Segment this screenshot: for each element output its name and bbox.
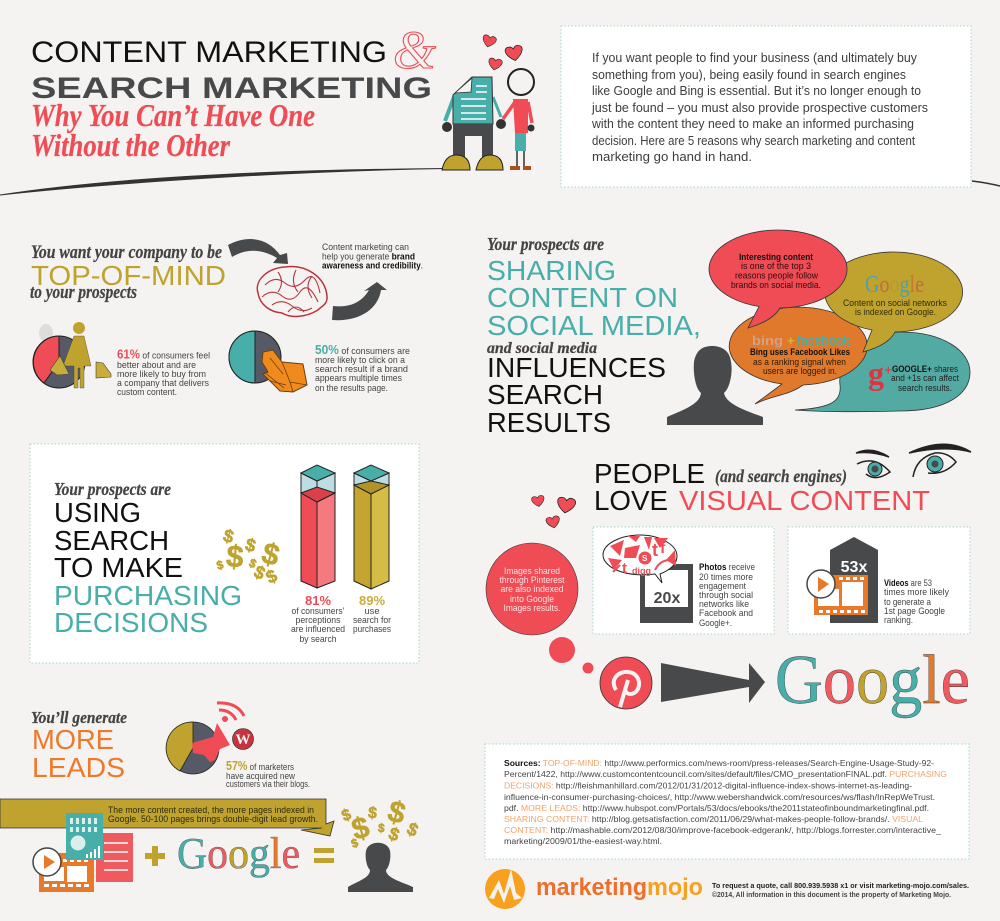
bar label: 81% xyxy=(291,593,345,644)
icon: photo frame xyxy=(640,564,693,623)
title: Without the Other xyxy=(31,127,230,163)
text: videos: to generate a xyxy=(884,597,932,607)
speech bubble: Bing and Facebook: users are logged in. xyxy=(763,366,837,376)
title: & xyxy=(393,20,436,80)
panel: sources xyxy=(485,744,969,859)
bar label: 89%: purchases xyxy=(353,624,391,634)
pie chart and megaphone: 57% xyxy=(166,703,254,774)
text: photos xyxy=(699,562,755,628)
logo: Marketing Mojo xyxy=(485,869,703,909)
panel: photos xyxy=(593,527,774,634)
panel: intro text: with the content they need to make an informed purchasing xyxy=(591,117,914,131)
thought bubble: Pinterest: through Pinterest xyxy=(500,575,565,585)
heading: more leads xyxy=(31,708,127,783)
icon: dollar signs: $ xyxy=(243,534,258,556)
icon: 53x tag and film strip xyxy=(807,537,878,623)
stat: 61%: more likely to buy from xyxy=(117,369,206,379)
icon: 53x tag and film strip: 53x xyxy=(841,559,867,576)
pie chart and megaphone: 57%: W xyxy=(236,732,250,748)
callout banner: The more content created, the more pages indexed in xyxy=(108,805,314,815)
heading: using search to make purchasing decisions: TO MAKE xyxy=(54,552,183,583)
speech bubble: interesting content: reasons people follow xyxy=(735,270,818,280)
panel: sources: CONTENT: http://mashable.com/2012/08/30/improve-facebook-edgerank/, http://blogs.forrester.com/interactive_ xyxy=(504,825,941,835)
icon: person with dollar signs: $ xyxy=(349,835,360,851)
icon: person with dollar signs: $ xyxy=(367,805,378,822)
pie chart and cursor: 50% xyxy=(229,331,307,392)
heading: top-of-mind: You want your company to be xyxy=(31,242,222,263)
heading: sharing content: Your prospects are xyxy=(487,234,604,254)
icon: person with dollar signs: $ xyxy=(386,823,402,845)
speech bubble: Google+: and +1s can affect xyxy=(891,373,959,383)
stat: 50%: search result if a brand xyxy=(315,364,408,374)
icon: person silhouette xyxy=(667,346,763,425)
title xyxy=(31,20,436,163)
logo: Marketing Mojo: marketing xyxy=(536,874,647,901)
icon: social media speech bubble: S xyxy=(642,554,648,563)
stat: 61%: better about and are xyxy=(117,360,196,370)
icon: dollar signs: $ xyxy=(221,525,236,547)
heading: people love visual content: (and search engines) xyxy=(715,466,847,487)
text: brand awareness: Content marketing can xyxy=(322,242,409,252)
pie chart and shopper: 61% xyxy=(33,322,111,388)
speech bubble: Bing and Facebook: bing xyxy=(752,333,783,348)
panel: intro text: like Google and Bing is essential. But it’s no longer enough to xyxy=(592,84,921,98)
callout banner xyxy=(0,799,334,836)
stat: 57%: have acquired new xyxy=(226,771,295,781)
panel: intro text: something from you), being easily found in search engines xyxy=(592,68,906,82)
bar label: 89%: search for xyxy=(353,615,391,625)
speech bubble: Google+: + xyxy=(884,363,893,379)
arrow: into brain xyxy=(228,239,288,264)
speech bubble: Bing and Facebook: Bing uses Facebook Likes xyxy=(750,347,850,357)
bar label: 81%: perceptions xyxy=(296,615,341,625)
stat: 50% xyxy=(315,343,410,393)
icon: person with dollar signs: $ xyxy=(404,818,421,841)
speech bubble: Bing and Facebook: as a ranking signal when xyxy=(753,357,846,367)
heading: sharing content: SEARCH xyxy=(487,379,603,410)
heading: sharing content: INFLUENCES xyxy=(487,352,666,383)
text: brand awareness xyxy=(322,242,423,270)
icon: social media speech bubble: f xyxy=(660,540,666,557)
heading: more leads: MORE xyxy=(32,724,114,755)
icon: hearts above couple xyxy=(481,34,524,71)
thought bubble: Pinterest: Images shared xyxy=(504,566,560,576)
logo: Google small: Google xyxy=(177,829,300,878)
speech bubble: Google+: GOOGLE+ shares xyxy=(892,364,958,374)
bar label: 89% xyxy=(353,593,391,634)
stat: 57% xyxy=(226,759,310,789)
bar label: 81%: 81% xyxy=(305,593,331,608)
title: CONTENT MARKETING xyxy=(31,36,387,69)
speech bubble: Bing and Facebook: facebook xyxy=(797,332,850,348)
panel: purchasing decisions xyxy=(30,444,419,663)
heading: more leads: LEADS xyxy=(32,752,125,783)
heading: sharing content: SHARING xyxy=(487,255,616,286)
bar label: 89%: use xyxy=(364,606,380,616)
stat: 50%: on the results page. xyxy=(315,383,388,393)
bar chart: 81% xyxy=(301,465,335,588)
speech bubble: Google: Content on social networks xyxy=(843,298,947,308)
speech bubble: interesting content: Interesting content xyxy=(739,252,813,262)
stat: 61% xyxy=(117,348,210,397)
speech bubble: interesting content xyxy=(709,230,847,328)
speech bubble: interesting content: brands on social media. xyxy=(731,280,821,290)
icon: dollar signs: $ xyxy=(251,561,268,584)
icon: Pinterest logo xyxy=(600,657,652,709)
stat: 57%: 57% of marketers xyxy=(226,759,294,773)
heading: sharing content: SOCIAL MEDIA, xyxy=(487,310,701,341)
icon: hearts xyxy=(531,495,576,529)
panel: sources: influence-in-consumer-purchasing-choices/, http://www.webershandwick.com/resources/ws/flash/InRepWeTrust. xyxy=(504,792,935,802)
icon: dollar signs: $ xyxy=(215,557,225,573)
text: videos xyxy=(884,578,949,625)
heading: people love visual content: PEOPLE xyxy=(594,458,705,489)
stat: 61%: custom content. xyxy=(117,387,177,397)
heading: using search to make purchasing decisions: SEARCH xyxy=(54,525,169,556)
text: videos: Videos are 53 xyxy=(884,578,932,588)
icon: social media speech bubble xyxy=(603,535,677,583)
thought bubble: Pinterest: are also indexed xyxy=(500,584,564,594)
icon: person with dollar signs xyxy=(339,795,421,892)
footer text: To request a quote, call 800.939.5938 x1 or visit marketing-mojo.com/sales. xyxy=(712,881,969,890)
bar label: 81%: by search xyxy=(300,634,336,644)
text: photos: networks like xyxy=(699,599,749,609)
heading: sharing content: and social media xyxy=(487,340,597,357)
icon: person with dollar signs: $ xyxy=(348,811,373,847)
heading: sharing content: CONTENT ON xyxy=(487,282,678,313)
speech bubble: Google+: search results. xyxy=(898,383,952,393)
title: SEARCH MARKETING xyxy=(31,72,432,105)
icon: dollar signs: $ xyxy=(225,538,245,575)
icon: dollar signs: $ xyxy=(247,556,259,571)
title: Why You Can’t Have One xyxy=(31,97,315,133)
icon: eyes xyxy=(856,444,971,478)
icon: dollar signs: $ xyxy=(258,537,283,573)
logo: Marketing Mojo: mojo xyxy=(647,874,703,901)
text: photos: Google+. xyxy=(699,618,732,628)
heading: people love visual content xyxy=(594,458,930,516)
panel: sources: SHARING CONTENT: http://blog.getsatisfaction.com/2011/06/29/what-makes-people-follow-brands/. VISUAL xyxy=(504,814,923,824)
heading: top-of-mind: TOP-OF-MIND xyxy=(31,260,226,291)
panel: sources: Percent/1422, http://www.customcontentcouncil.com/sites/default/files/CMO_presentationFINAL.pdf. PURCHASING xyxy=(504,769,947,779)
panel: videos xyxy=(788,527,970,634)
icon: photo frame: 20x xyxy=(654,590,680,607)
text: brand awareness: awareness and credibility. xyxy=(322,260,423,270)
icon: person with dollar signs: $ xyxy=(384,795,409,831)
speech bubble: Bing and Facebook xyxy=(729,307,867,404)
heading: using search to make purchasing decisions: DECISIONS xyxy=(54,607,208,638)
stat: 61%: a company that delivers xyxy=(117,378,209,388)
panel: sources: Sources: TOP-OF-MIND: http://www.performics.com/news-room/press-releases/Search-Engine-Usage-Study-92- xyxy=(504,758,934,768)
icon: dollar signs: $ xyxy=(263,565,280,588)
panel: sources: pdf. MORE LEADS: http://www.hubspot.com/Portals/53/docs/ebooks/the2011stateofinboundmarketingfinal.pdf. xyxy=(504,803,929,813)
panel: sources: DECISIONS: http://fleishmanhillard.com/2012/01/31/2012-digital-influence-index-shows-internet-as-leading- xyxy=(504,780,912,790)
icon: social media speech bubble: t xyxy=(652,540,658,560)
equation: plus sign xyxy=(145,846,165,866)
speech bubble: Google+: g xyxy=(868,355,884,391)
heading: using search to make purchasing decisions: Your prospects are xyxy=(54,479,171,499)
text: photos: Photos receive xyxy=(699,562,755,572)
text: photos: engagement xyxy=(699,581,746,591)
arrow: out of brain xyxy=(332,282,387,320)
icon: brain xyxy=(257,267,327,316)
panel: intro text: just be found – you must also provide prospective customers xyxy=(591,101,928,115)
text: brand awareness: help you generate brand xyxy=(322,252,415,262)
heading: people love visual content: LOVE xyxy=(594,485,668,516)
thought bubble: Pinterest xyxy=(486,543,594,674)
stat: 50%: more likely to click on a xyxy=(315,355,406,365)
text: videos: ranking. xyxy=(884,615,913,625)
arrow: Pinterest to Google xyxy=(661,663,765,703)
callout banner: Google. 50-100 pages brings double-digit lead growth. xyxy=(108,814,318,824)
panel: intro text xyxy=(561,26,971,187)
speech bubble: Google: is indexed on Google. xyxy=(855,307,936,317)
text: photos: 20 times more xyxy=(699,572,753,582)
heading: people love visual content: VISUAL CONTENT xyxy=(679,485,930,516)
icon: social media speech bubble: t xyxy=(622,560,627,577)
speech bubble: Bing and Facebook: + xyxy=(787,333,795,348)
bar label: 81%: are influenced xyxy=(291,624,345,634)
equation: equals sign xyxy=(314,848,334,863)
icon: social media speech bubble: digg xyxy=(632,566,651,576)
text: photos: through social xyxy=(699,590,753,600)
icon: dollar signs xyxy=(215,525,283,588)
speech bubble: Google+ xyxy=(795,332,970,412)
heading: using search to make purchasing decisions: USING xyxy=(54,497,141,528)
bar chart: 89% xyxy=(354,465,389,589)
footer text: ©2014, All information in this document is the property of Marketing Mojo. xyxy=(712,890,951,899)
heading: sharing content: RESULTS xyxy=(487,407,611,438)
speech bubble: interesting content: is one of the top 3 xyxy=(741,261,811,271)
heading: more leads: You’ll generate xyxy=(31,708,127,727)
panel: intro text: decision. Here are 5 reasons why search marketing and content xyxy=(592,134,915,148)
bar label: 89%: 89% xyxy=(359,593,385,608)
icon: person with dollar signs: $ xyxy=(339,806,354,825)
stat: 61%: 61% of consumers feel xyxy=(117,348,210,362)
stat: 57%: customers via their blogs. xyxy=(226,779,310,789)
heading: using search to make purchasing decisions xyxy=(54,479,242,638)
heading: using search to make purchasing decisions: PURCHASING xyxy=(54,580,242,611)
icon: person with dollar signs: $ xyxy=(377,821,386,835)
thought bubble: Pinterest: Images results. xyxy=(504,603,560,613)
stat: 50%: appears multiple times xyxy=(315,373,402,383)
bar label: 81%: of consumers’ xyxy=(292,606,344,616)
panel: intro text: If you want people to find your business (and ultimately buy xyxy=(592,51,918,65)
heading: top-of-mind xyxy=(30,242,226,303)
speech bubble: Google xyxy=(825,252,963,352)
heading: top-of-mind: to your prospects xyxy=(30,282,137,303)
text: photos: Facebook and xyxy=(699,608,753,618)
footer text xyxy=(712,881,969,899)
icon: content types xyxy=(33,813,133,892)
icon: document and person holding hands xyxy=(442,69,534,170)
stat: 50%: 50% of consumers are xyxy=(315,343,410,357)
speech bubble: Google: Google xyxy=(865,272,924,298)
heading: sharing content xyxy=(487,234,701,438)
panel: intro text: marketing go hand in hand. xyxy=(592,150,752,164)
text: videos: 1st page Google xyxy=(884,606,945,616)
thought bubble: Pinterest: into Google xyxy=(510,594,554,604)
text: videos: times more likely xyxy=(884,587,949,597)
logo: Google large: Google xyxy=(775,642,970,719)
panel: sources: marketing/2009/01/the-easiest-way.html. xyxy=(504,836,662,846)
header curve xyxy=(0,168,1000,195)
